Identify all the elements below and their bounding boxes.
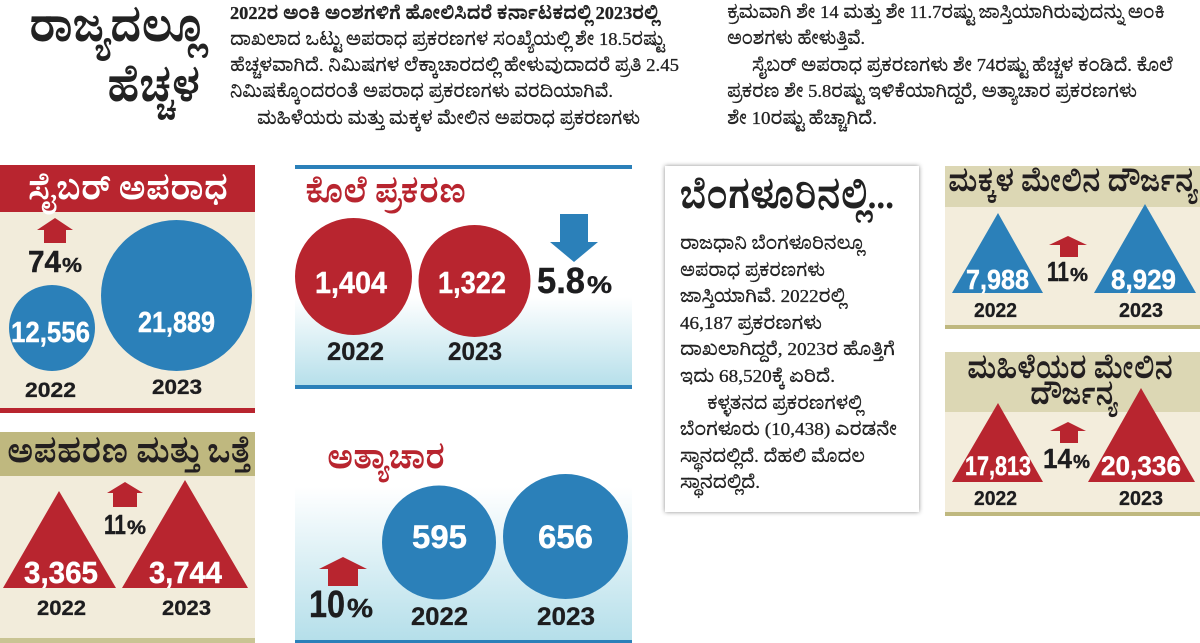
year 2022: 2022 — [411, 603, 468, 631]
value 656: 656 — [538, 519, 593, 555]
year 2022: 2022 — [974, 300, 1017, 322]
text block: Bengaluru details: ದಾಖಲಾಗಿದ್ದರೆ, 2023ರ ಹೊತ್ತಿಗೆ — [680, 339, 895, 362]
heading: in Bengaluru: ಬೆಂಗಳೂರಿನಲ್ಲಿ... — [680, 175, 894, 223]
circle 2022 — [382, 486, 496, 600]
year 2022: 2022 — [37, 597, 86, 620]
change: 10 percent — [309, 584, 373, 626]
title: ರಾಜ್ಯದಲ್ಲೂ — [29, 2, 209, 61]
text block: intro column one — [230, 3, 679, 131]
heading: murder: ಕೊಲೆ ಪ್ರಕರಣ — [305, 173, 466, 213]
value 7,988: 7,988 — [966, 264, 1029, 295]
change: 11 percent: 11 — [1047, 256, 1069, 287]
icon: up arrow 14 percent — [1050, 422, 1086, 443]
change: 74 percent — [28, 244, 82, 279]
icon: up arrow 11 percent — [1049, 236, 1087, 257]
change: 14 percent: % — [1073, 452, 1090, 472]
heading: crimes against women: ಮಹಿಳೆಯರ ಮೇಲಿನ — [967, 353, 1173, 385]
year 2023: 2023 — [1119, 488, 1163, 510]
change: 14 percent: 14 — [1043, 443, 1072, 474]
panel: in Bengaluru — [665, 166, 919, 512]
icon: up arrow 74 percent — [37, 218, 73, 243]
text block: intro column one: ಹೆಚ್ಚಳವಾಗಿದೆ. ನಿಮಿಷಗಳ ಲೆಕ್ಕಾಚಾರದಲ್ಲಿ ಹೇಳುವುದಾದರೆ ಪ್ರತಿ 2.45 — [230, 55, 679, 79]
text block: intro column two: ಅಂಶಗಳು ಹೇಳುತ್ತಿವೆ. — [727, 28, 865, 51]
text block: intro column two — [727, 2, 1173, 132]
panel: cyber crime — [0, 165, 255, 413]
change: 74 percent: 74 — [28, 244, 62, 279]
value 3,365: 3,365 — [24, 555, 98, 590]
triangle 2023 — [122, 480, 248, 588]
value 1,322: 1,322 — [438, 265, 506, 300]
heading: cyber crime: ಸೈಬರ್ ಅಪರಾಧ — [28, 170, 228, 214]
year 2022: 2022 — [327, 338, 384, 366]
change: 11 percent: % — [1070, 265, 1088, 285]
circle 2022 — [9, 285, 95, 371]
change: 11 percent: 11 — [104, 509, 126, 540]
change: 10 percent: 10 — [309, 584, 345, 626]
triangle 2023 — [1088, 388, 1195, 482]
text block: Bengaluru details: ರಾಜಧಾನಿ ಬೆಂಗಳೂರಿನಲ್ಲೂ — [680, 233, 866, 256]
text block: Bengaluru details: 46,187 ಪ್ರಕರಣಗಳು — [680, 313, 822, 336]
text block: intro column one: ಮಹಿಳೆಯರು ಮತ್ತು ಮಕ್ಕಳ ಮೇಲಿನ ಅಪರಾಧ ಪ್ರಕರಣಗಳು — [257, 108, 640, 131]
text block: intro column two: ಶೇ 10ರಷ್ಟು ಹೆಚ್ಚಾಗಿದೆ. — [727, 108, 877, 132]
panel: murder cases — [295, 165, 632, 389]
value 12,556: 12,556 — [11, 317, 90, 349]
value 3,744: 3,744 — [149, 555, 223, 590]
text block: intro column two: ಸೈಬರ್ ಅಪರಾಧ ಪ್ರಕರಣಗಳು ಶೇ 74ರಷ್ಟು ಹೆಚ್ಚಳ ಕಂಡಿದೆ. ಕೊಲೆ — [752, 55, 1173, 80]
panel: kidnapping and hostage — [0, 432, 255, 643]
text block: Bengaluru details: ಕಳ್ಳತನದ ಪ್ರಕರಣಗಳಲ್ಲಿ — [707, 393, 865, 417]
heading: crimes against women — [967, 353, 1173, 417]
text block: Bengaluru details: ಇದು 68,520ಕ್ಕೆ ಏರಿದೆ. — [680, 366, 835, 389]
year 2023: 2023 — [1119, 300, 1163, 322]
text block: intro column one: 2022ರ ಅಂಕಿ ಅಂಶಗಳಿಗೆ ಹೋಲಿಸಿದರೆ ಕರ್ನಾಟಕದಲ್ಲಿ 2023ರಲ್ಲಿ — [230, 3, 661, 26]
text block: Bengaluru details: ಜಾಸ್ತಿಯಾಗಿವೆ. 2022ರಲ್ಲಿ — [680, 286, 848, 309]
change: 11 percent: % — [127, 518, 146, 539]
value 21,889: 21,889 — [138, 307, 215, 339]
panel: crimes against women — [945, 352, 1200, 516]
panel: crimes against children — [945, 166, 1200, 329]
circle 2022 — [295, 218, 412, 335]
triangle 2022 — [952, 213, 1043, 293]
change: 5.8 percent: 5.8 — [537, 260, 585, 301]
change: 5.8 percent — [537, 260, 612, 301]
year 2023: 2023 — [152, 376, 202, 399]
circle 2023 — [503, 474, 628, 599]
text block: intro column one: ದಾಖಲಾದ ಒಟ್ಟು ಅಪರಾಧ ಪ್ರಕರಣಗಳ ಸಂಖ್ಯೆಯಲ್ಲಿ ಶೇ 18.5ರಷ್ಟು — [230, 29, 666, 54]
title — [29, 2, 209, 120]
change: 14 percent — [1043, 443, 1090, 474]
panel: atrocity cases — [295, 439, 632, 643]
text block: Bengaluru details: ಬೆಂಗಳೂರು (10,438) ಎರಡನೇ — [680, 419, 897, 440]
icon: down arrow — [550, 214, 598, 262]
text block: Bengaluru details: ಅಪರಾಧ ಪ್ರಕರಣಗಳು — [680, 260, 825, 283]
text block: intro column one: ನಿಮಿಷಕ್ಕೊಂದರಂತೆ ಅಪರಾಧ ಪ್ರಕರಣಗಳು ವರದಿಯಾಗಿವೆ. — [230, 81, 613, 104]
change: 10 percent: % — [347, 593, 373, 623]
circle 2023 — [418, 225, 530, 337]
year 2023: 2023 — [448, 338, 502, 366]
value 17,813: 17,813 — [965, 451, 1031, 481]
year 2023: 2023 — [162, 597, 211, 620]
value 1,404: 1,404 — [315, 265, 388, 300]
heading: crimes against women: ದೌರ್ಜನ್ಯ — [1030, 379, 1119, 417]
text block: Bengaluru details: ಸ್ಥಾನದಲ್ಲಿದೆ. — [680, 472, 760, 498]
text block: Bengaluru details — [680, 233, 897, 498]
value 8,929: 8,929 — [1111, 264, 1176, 295]
circle 2023 — [101, 220, 252, 371]
triangle 2022 — [952, 403, 1043, 482]
year 2023: 2023 — [537, 603, 595, 631]
icon: up arrow 11 percent — [107, 482, 143, 507]
value 20,336: 20,336 — [1101, 451, 1181, 481]
value 595: 595 — [412, 519, 467, 555]
icon: up arrow 10 percent — [319, 557, 367, 586]
year 2022: 2022 — [25, 379, 76, 402]
change: 74 percent: % — [62, 255, 82, 277]
text block: Bengaluru details: ಸ್ಥಾನದಲ್ಲಿದೆ. ದೆಹಲಿ ಮೊದಲ — [680, 446, 865, 472]
triangle 2023 — [1094, 204, 1196, 293]
change: 5.8 percent: % — [587, 272, 612, 299]
year 2022: 2022 — [974, 488, 1017, 510]
text block: intro column two: ಪ್ರಕರಣ ಶೇ 5.8ರಷ್ಟು ಇಳಿಕೆಯಾಗಿದ್ದರೆ, ಅತ್ಯಾಚಾರ ಪ್ರಕರಣಗಳು — [727, 81, 1137, 106]
text block: intro column two: ಕ್ರಮವಾಗಿ ಶೇ 14 ಮತ್ತು ಶೇ 11.7ರಷ್ಟು ಜಾಸ್ತಿಯಾಗಿರುವುದನ್ನು ಅಂಕಿ — [727, 2, 1165, 26]
triangle 2022 — [3, 491, 116, 588]
title: ಹೆಚ್ಚಳ — [107, 62, 200, 120]
heading: kidnapping: ಅಪಹರಣ ಮತ್ತು ಒತ್ತೆ — [7, 433, 251, 473]
heading: atrocity: ಅತ್ಯಾಚಾರ — [327, 439, 445, 483]
